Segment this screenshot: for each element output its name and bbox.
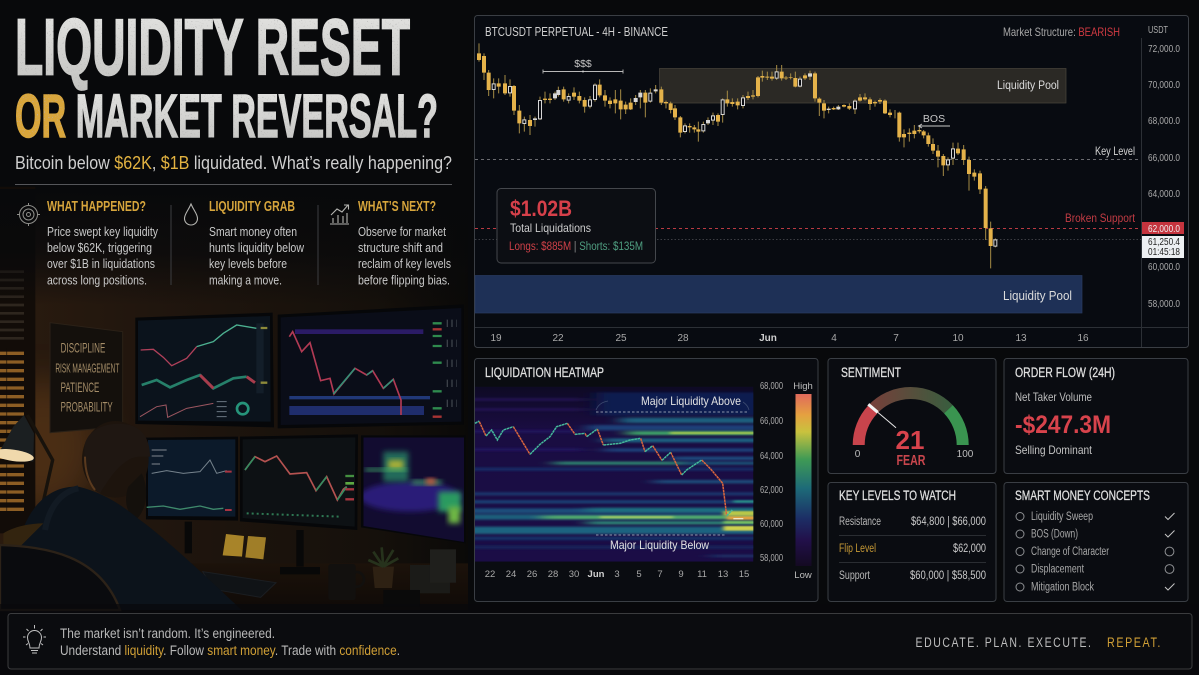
panel: sentiment: FEAR [896,453,926,469]
body text: over $1B in liquidations [47,257,155,271]
title [15,2,438,150]
heading: WHAT’S NEXT? [358,199,436,215]
wall [0,190,470,610]
wall poster [50,323,123,433]
panel: smart money concepts [1004,482,1188,602]
monitor 1 [135,313,274,427]
photo: trader at desk with monitors [0,187,470,610]
row: flip level: $62,000 [953,543,986,555]
label: key level: Key Level [1095,144,1135,158]
concept list: Change of Character [1031,546,1109,558]
callout: major liquidity above [596,394,749,412]
panel: main BTC chart [474,16,1188,348]
monitor 4 [240,434,358,530]
keyboard [203,572,276,597]
liquidity pool zone upper: Liquidity Pool [997,80,1059,92]
liquidity pool zone lower: Liquidity Pool [1003,289,1072,303]
heatmap date axis: 9 [678,569,684,580]
body text: before flipping bias. [358,274,450,288]
body text: structure shift and [358,241,443,255]
net volume value: -$247.3M [1015,411,1111,439]
colour scale legend: High [793,381,813,392]
window blinds [0,187,35,533]
row: flip level [839,543,986,555]
row: support [839,570,986,582]
body text: Price swept key liquidity [47,225,159,239]
date axis: 7 [893,333,899,344]
body text: Observe for market [358,225,446,239]
heatmap date axis: 24 [506,569,516,580]
panel: sentiment [828,358,996,474]
heatmap chart [474,386,754,562]
wall poster: RISK MANAGEMENT [55,361,119,375]
heatmap date axis: 3 [614,569,620,580]
panel: key levels to watch [828,482,996,602]
body text: making a move. [209,274,282,288]
column: liquidity grab [184,199,305,288]
price axis: 64,000.0 [1148,189,1180,200]
date axis: 10 [952,333,964,344]
row: support: $60,000 | $58,500 [910,570,986,582]
date axis: 25 [615,333,627,344]
heatmap date axis: 28 [548,569,558,580]
price axis: 60,000.0 [1148,262,1180,273]
wall poster: PATIENCE [61,379,99,395]
body text: key levels before [209,257,287,271]
column: what happened [17,199,159,288]
price axis: 58,000.0 [1148,299,1180,310]
heatmap date axis: 26 [527,569,537,580]
body text: reclaim of key levels [358,257,451,271]
footer slogan: EDUCATE. PLAN. EXECUTE. [916,635,1092,650]
panel: order flow: Selling Dominant [1015,443,1093,457]
heading: KEY LEVELS TO WATCH [839,488,956,503]
desk lamp [0,415,53,513]
liquidity pool zone upper [660,68,1066,103]
right-edge mask behind panels [468,0,1199,675]
lamp glow on wall [0,380,100,513]
body text: below $62K, triggering [47,241,152,255]
icon: light bulb [23,625,46,653]
icon: growth chart [330,205,349,224]
panel: order flow: Net Taker Volume [1015,390,1092,404]
heatmap price axis: 58,000 [760,553,783,564]
gauge labels: 0 [855,449,861,460]
body text [47,225,159,288]
body text: hunts liquidity below [209,241,305,255]
row: support: Support [839,570,871,582]
photo top fade [0,189,470,305]
body text: Smart money often [209,225,297,239]
heading: SENTIMENT [841,365,901,380]
title: LIQUIDITY RESET [15,2,410,92]
price tag: 62,000 [1142,222,1184,235]
callout: major liquidity above: Major Liquidity Above [641,394,741,408]
date axis [490,333,1089,344]
footer message: The market isn’t random. It’s engineered. [60,626,275,641]
callout: total liquidations [497,188,656,263]
annotation: BOS: BOS [923,113,945,125]
coffee mug [328,564,364,600]
heading: ORDER FLOW (24H) [1015,365,1115,380]
body text [209,225,305,288]
monitor stands [188,522,320,571]
date axis: 4 [831,333,837,344]
heading: SMART MONEY CONCEPTS [1015,488,1150,503]
date axis: 19 [490,333,502,344]
annotation: swing highs [543,58,623,74]
heading: LIQUIDITY GRAB [209,199,295,215]
heatmap price axis: 62,000 [760,485,783,496]
concept list: Mitigation Block [1031,582,1094,594]
footer slogan: REPEAT. [1107,635,1162,650]
desk box [383,549,456,607]
heading: WHAT HAPPENED? [47,199,146,215]
heatmap price axis: 60,000 [760,519,783,530]
bottom band [0,604,1199,675]
row: resistance: Resistance [839,516,881,528]
wall poster: PROBABILITY [61,399,113,415]
footer message: Understand liquidity. Follow smart money. Trade with confidence. [60,643,400,658]
callout: total liquidations: $1.02B [510,196,572,221]
heatmap date axis: 30 [569,569,579,580]
title: OR MARKET REVERSAL? [15,82,438,150]
callout: total liquidations: Longs: $885M | Shorts: $135M [509,241,643,253]
label: broken support: Broken Support [1065,211,1136,225]
concept list [1031,511,1109,594]
row: flip level: Flip Level [839,543,876,555]
footer bar [8,614,1192,669]
row: resistance: $64,800 | $66,000 [911,516,986,528]
price line on heatmap [475,421,732,516]
heatmap date axis: Jun [588,569,605,580]
price axis: 66,000.0 [1148,153,1180,164]
concept list: Liquidity Sweep [1031,511,1093,523]
chair [0,545,120,610]
row: resistance [839,516,986,528]
body text: across long positions. [47,274,147,288]
market structure: Market Structure: BEARISH [1003,25,1120,39]
colour scale legend: Low [794,570,812,581]
callout: total liquidations: Total Liquidations [510,221,591,235]
liquidity pool zone lower [475,276,1082,313]
price axis: 70,000.0 [1148,80,1180,91]
date axis: Jun [759,333,777,344]
price tag: current: 01:45:18 [1148,247,1180,258]
price axis: 68,000.0 [1148,116,1180,127]
heatmap date axis: 22 [485,569,495,580]
price tag: current [1142,236,1184,258]
date axis: 16 [1077,333,1089,344]
price tag: current: 61,250.4 [1148,237,1180,248]
footer message [60,626,400,658]
person silhouette [0,421,242,610]
heatmap date axis: 13 [718,569,728,580]
divider under subtitle [15,184,452,186]
icon: water drop [184,204,198,225]
key level lines [475,158,1141,160]
heatmap date axis: 7 [657,569,663,580]
heatmap price axis: 68,000 [760,381,783,392]
candlesticks left part [479,43,838,142]
wall poster: DISCIPLINE [61,340,105,356]
monitor 5 with heatmap [360,435,466,543]
heatmap date axis [485,569,749,580]
desk [180,563,470,610]
heatmap price axis [760,381,783,564]
concept list: Displacement [1031,564,1085,576]
sticky notes [223,534,266,559]
icon: target [17,203,40,226]
monitor 3 [146,437,238,521]
heatmap price axis: 66,000 [760,416,783,427]
panel: liquidation heatmap [450,358,818,602]
panel: order flow [1004,358,1188,474]
colour scale legend [793,381,813,581]
price axis [1148,25,1180,310]
candlesticks right part [844,93,995,268]
gauge [859,393,963,445]
heatmap date axis: 5 [636,569,642,580]
price axis: 72,000.0 [1148,44,1180,55]
heatmap date axis: 15 [739,569,749,580]
callout: major liquidity below: Major Liquidity Below [610,538,709,552]
date axis: 13 [1015,333,1027,344]
annotation: BOS [918,113,950,128]
price axis: USDT [1148,25,1168,36]
date axis: 28 [677,333,689,344]
check marks [1165,513,1174,590]
annotation: swing highs: $$$ [574,58,592,70]
panel: sentiment: 100 [957,449,974,460]
date axis: 22 [552,333,564,344]
price tag: 62,000: 62,000.0 [1148,224,1180,235]
heatmap price axis: 64,000 [760,451,783,462]
monitor 2 [278,304,464,428]
heading: LIQUIDATION HEATMAP [485,365,604,380]
status circles [1016,512,1174,591]
chart title: BTCUSDT PERPETUAL - 4H - BINANCE [485,24,668,39]
heatmap date axis: 11 [697,569,707,580]
body text [358,225,451,288]
column: what's next [330,199,451,288]
subtitle: Bitcoin below $62K, $1B liquidated. What’s really happening? [15,152,452,173]
concept list: BOS (Down) [1031,528,1078,540]
potted plant [368,547,398,588]
sentiment value: 21 [896,425,924,455]
